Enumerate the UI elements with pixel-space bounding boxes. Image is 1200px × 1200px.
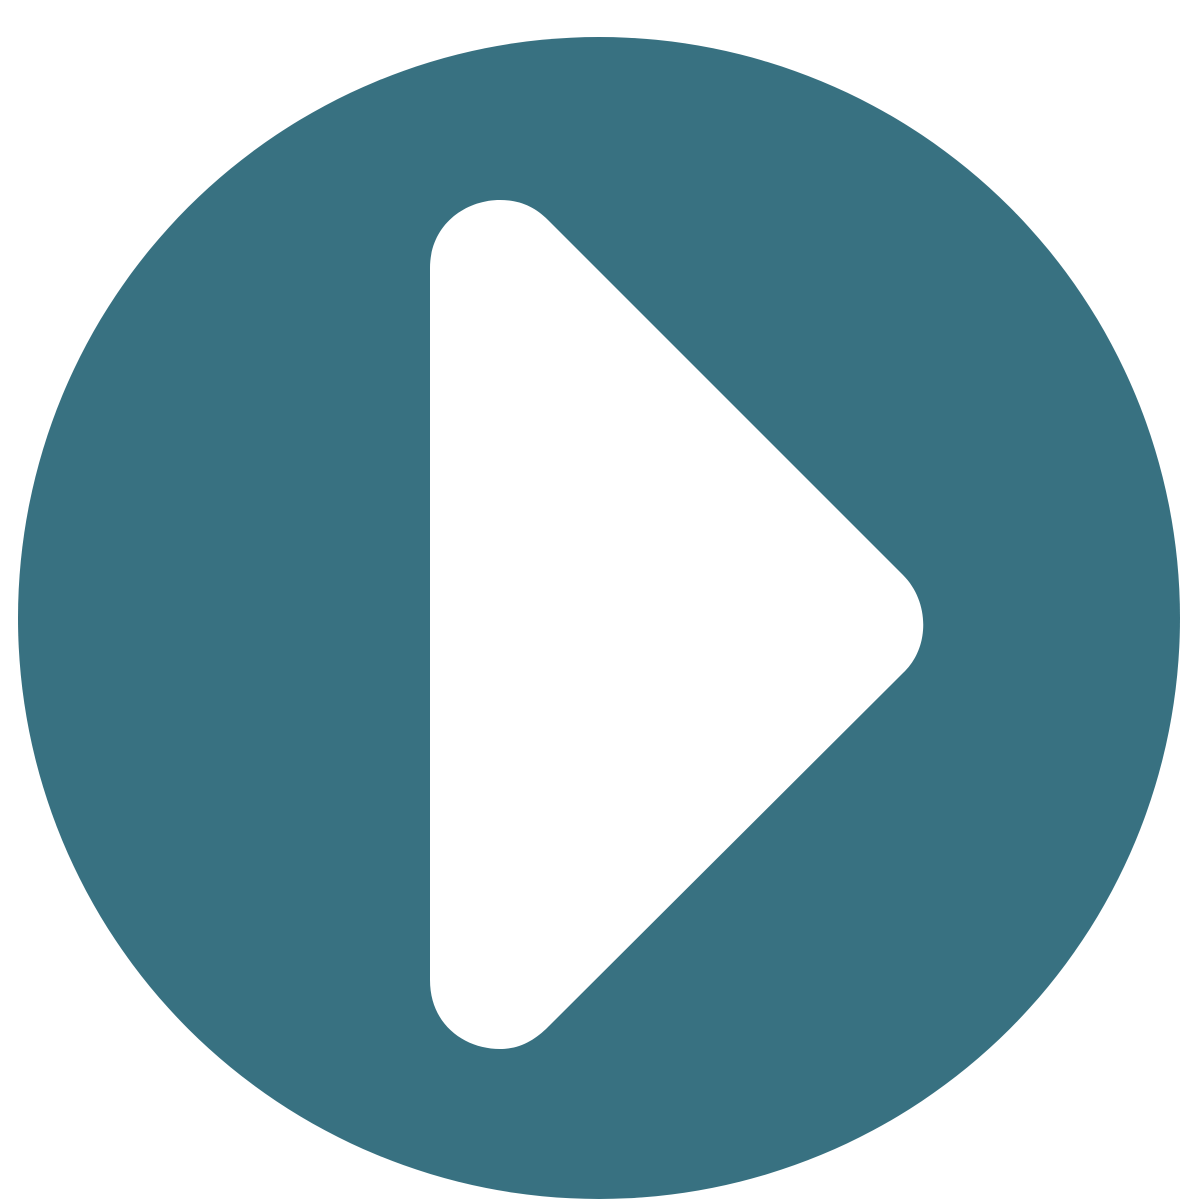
icon: play triangle: [430, 200, 923, 1049]
